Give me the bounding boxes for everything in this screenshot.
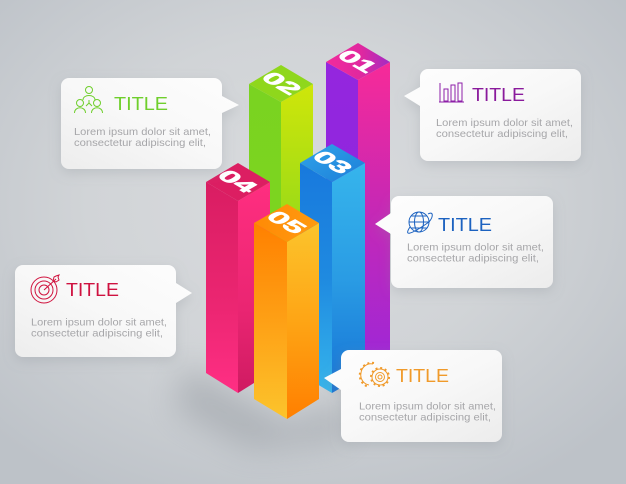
heading: TITLE [66, 280, 119, 300]
body text: Lorem ipsum dolor sit amet, [436, 117, 573, 129]
callout: red title: consectetur adipiscing elit, [31, 328, 163, 340]
callout box [61, 78, 239, 169]
number 03: 03 [307, 147, 359, 177]
heading: TITLE [114, 94, 168, 114]
number 01: 01 [332, 46, 384, 76]
callout: blue title: consectetur adipiscing elit, [407, 252, 539, 264]
callout: green title: consectetur adipiscing elit, [74, 137, 206, 149]
bar 04 [206, 163, 270, 393]
icon: gears [360, 363, 389, 387]
callout box [404, 69, 581, 161]
bar 05 [254, 204, 319, 419]
icon: target [31, 275, 59, 303]
icon: globe [408, 212, 432, 233]
callout box [15, 265, 192, 357]
callout: orange title: consectetur adipiscing elit, [359, 412, 491, 424]
callout: green title [61, 78, 239, 169]
callout: blue title [375, 196, 553, 288]
heading: TITLE [396, 366, 449, 386]
heading: TITLE [472, 85, 525, 105]
chart base shadow [175, 365, 345, 450]
bar 01 [326, 43, 390, 378]
callout box [324, 350, 502, 442]
body text: Lorem ipsum dolor sit amet, [407, 242, 544, 254]
bar 03 [300, 144, 365, 393]
callout: purple title [404, 69, 581, 161]
body text: Lorem ipsum dolor sit amet, [359, 400, 496, 412]
icon: bar chart [439, 83, 464, 102]
icon: people network [74, 86, 102, 113]
body text: Lorem ipsum dolor sit amet, [74, 126, 211, 138]
callout: red title [15, 265, 192, 357]
body text: Lorem ipsum dolor sit amet, [31, 316, 167, 328]
number 05: 05 [261, 207, 313, 237]
bar 02 [249, 65, 313, 360]
number 02: 02 [256, 68, 308, 98]
number 04: 04 [212, 166, 264, 197]
callout: purple title: consectetur adipiscing elit, [436, 128, 568, 140]
callout: orange title [324, 350, 502, 442]
heading: TITLE [438, 215, 492, 235]
callout box [375, 196, 553, 288]
